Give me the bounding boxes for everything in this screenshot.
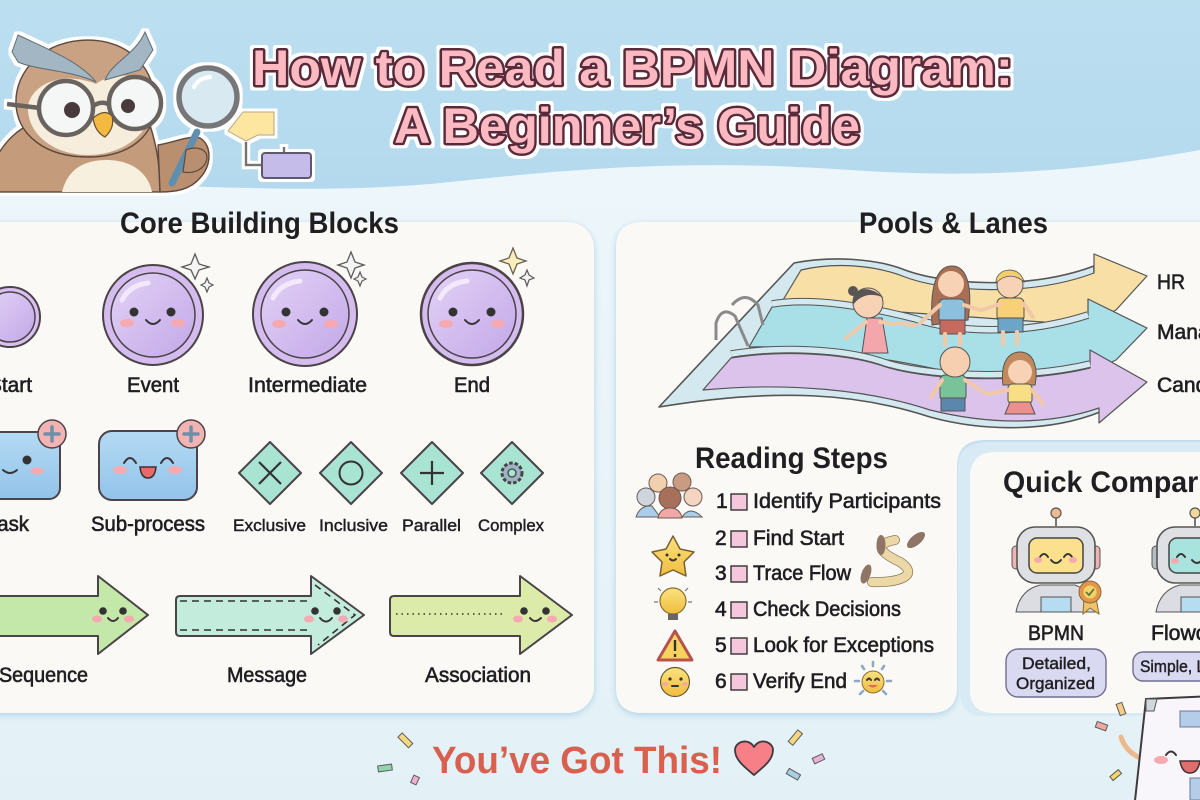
panel shaded surround xyxy=(960,442,1200,716)
header sky band with wavy edge xyxy=(0,0,1200,189)
panel: core building blocks xyxy=(0,207,594,713)
lane: candidate xyxy=(703,350,1147,423)
icon: group of people xyxy=(636,473,702,518)
step 5: 5 xyxy=(715,634,727,657)
owl head xyxy=(16,40,155,157)
icon: star xyxy=(652,536,694,576)
lane label: HR: HR xyxy=(1157,271,1185,294)
owl face xyxy=(28,76,152,155)
mascot page xyxy=(1134,696,1200,800)
step 6: 6 xyxy=(715,670,727,693)
lane: HR xyxy=(783,254,1147,325)
step 2: 2 xyxy=(715,527,727,550)
mascot face xyxy=(1154,752,1200,773)
arrow: association: Association xyxy=(425,664,531,687)
pill: BPMN description: Detailed, xyxy=(1022,654,1091,673)
lane border strip xyxy=(772,302,1088,330)
gateway: exclusive: Exclusive xyxy=(233,516,306,535)
step 4: 4 xyxy=(715,598,727,621)
panel: pools and lanes with reading steps xyxy=(616,222,1200,713)
lane border strip fill xyxy=(731,350,1090,375)
heading: reading steps: Reading Steps xyxy=(695,442,888,475)
panel background xyxy=(970,452,1200,713)
icon: smiley xyxy=(660,668,690,696)
sub-process xyxy=(91,420,205,536)
title xyxy=(252,40,1013,154)
start event xyxy=(0,287,40,397)
mini flowchart behind magnifier xyxy=(228,112,311,178)
heading: pools and lanes: Pools & Lanes xyxy=(859,207,1048,240)
icon: footprints path xyxy=(858,529,928,585)
child: dark hair girl xyxy=(846,286,915,353)
pill: BPMN description xyxy=(1006,649,1106,697)
end event xyxy=(421,248,534,397)
owl beak xyxy=(93,112,113,137)
step 4: Check Decisions xyxy=(753,598,901,621)
purple task box xyxy=(262,153,311,178)
event xyxy=(103,254,213,397)
lane: manager xyxy=(749,299,1147,378)
pool frame xyxy=(659,259,1100,428)
robot: flowchart xyxy=(1151,508,1200,645)
sub-process: Sub-process xyxy=(91,513,205,536)
illustration: owl with magnifying glass xyxy=(0,32,237,192)
panel: quick comparison xyxy=(960,442,1200,716)
step 1: Identify Participants xyxy=(753,490,941,513)
owl chest xyxy=(62,160,152,192)
gateway: exclusive xyxy=(233,442,306,535)
gateway: complex xyxy=(478,442,544,535)
mascot flowchart detail xyxy=(1180,711,1200,800)
icon: warning triangle xyxy=(658,631,692,660)
pill: BPMN description: Organized xyxy=(1016,674,1095,693)
arrow: sequence flow: Sequence xyxy=(0,664,88,687)
mascot folded corner xyxy=(1146,699,1157,711)
icon: happy sun xyxy=(855,662,891,694)
robot: BPMN: BPMN xyxy=(1028,622,1084,645)
footer message: You’ve Got This! xyxy=(432,740,722,782)
mascot arm xyxy=(1121,737,1138,757)
step 2: Find Start xyxy=(753,527,844,550)
magnifier lens xyxy=(179,68,237,126)
owl eyes xyxy=(64,99,135,118)
pool diagram xyxy=(659,254,1147,428)
owl ear tufts xyxy=(12,32,153,82)
robot: BPMN xyxy=(1012,508,1101,645)
child: blond boy xyxy=(982,270,1033,344)
owl glasses xyxy=(7,77,161,135)
panel: reading steps xyxy=(636,442,941,696)
arrow: message flow xyxy=(176,576,364,687)
confetti xyxy=(378,702,1126,785)
gateway: complex: Complex xyxy=(478,516,544,535)
child: bald boy xyxy=(931,347,985,411)
event: Event xyxy=(127,374,179,397)
lens highlight xyxy=(194,77,210,87)
owl hand xyxy=(158,137,209,192)
gateway: parallel: Parallel xyxy=(402,516,461,535)
panel background xyxy=(0,222,594,713)
arrow: association xyxy=(390,576,572,687)
illustration: happy document mascot xyxy=(1121,696,1200,800)
intermediate event xyxy=(248,252,367,397)
task xyxy=(0,420,66,536)
step 3: 3 xyxy=(715,562,727,585)
owl fingers xyxy=(183,148,207,172)
intermediate event: Intermediate xyxy=(248,374,367,397)
magnifier handle xyxy=(172,132,197,183)
arrow: sequence flow xyxy=(0,576,148,687)
lane border strip fill xyxy=(772,302,1088,330)
title: How to Read a BPMN Diagram: xyxy=(252,40,1013,96)
icon: heart xyxy=(735,741,773,775)
pill: flowchart description xyxy=(1133,652,1200,681)
child: brown hair girl xyxy=(920,266,980,345)
ladder xyxy=(716,298,763,346)
arrow: message flow: Message xyxy=(227,664,307,687)
heading: core building blocks: Core Building Blocks xyxy=(120,207,399,240)
gateway: inclusive: Inclusive xyxy=(319,516,388,535)
icon: light bulb xyxy=(654,588,692,620)
gateway: inclusive xyxy=(319,442,388,535)
connector lines xyxy=(246,142,284,165)
owl body xyxy=(0,125,160,192)
gateway: parallel xyxy=(401,442,463,535)
step 5: Look for Exceptions xyxy=(753,634,934,657)
title: A Beginner’s Guide xyxy=(394,98,860,154)
yellow decision shape xyxy=(228,112,274,141)
step 6: Verify End xyxy=(753,670,847,693)
child: long hair girl xyxy=(988,352,1043,414)
end event: End xyxy=(454,374,490,397)
step 1: 1 xyxy=(716,490,728,513)
lane border strip xyxy=(731,350,1090,375)
step 3: Trace Flow xyxy=(753,562,852,585)
